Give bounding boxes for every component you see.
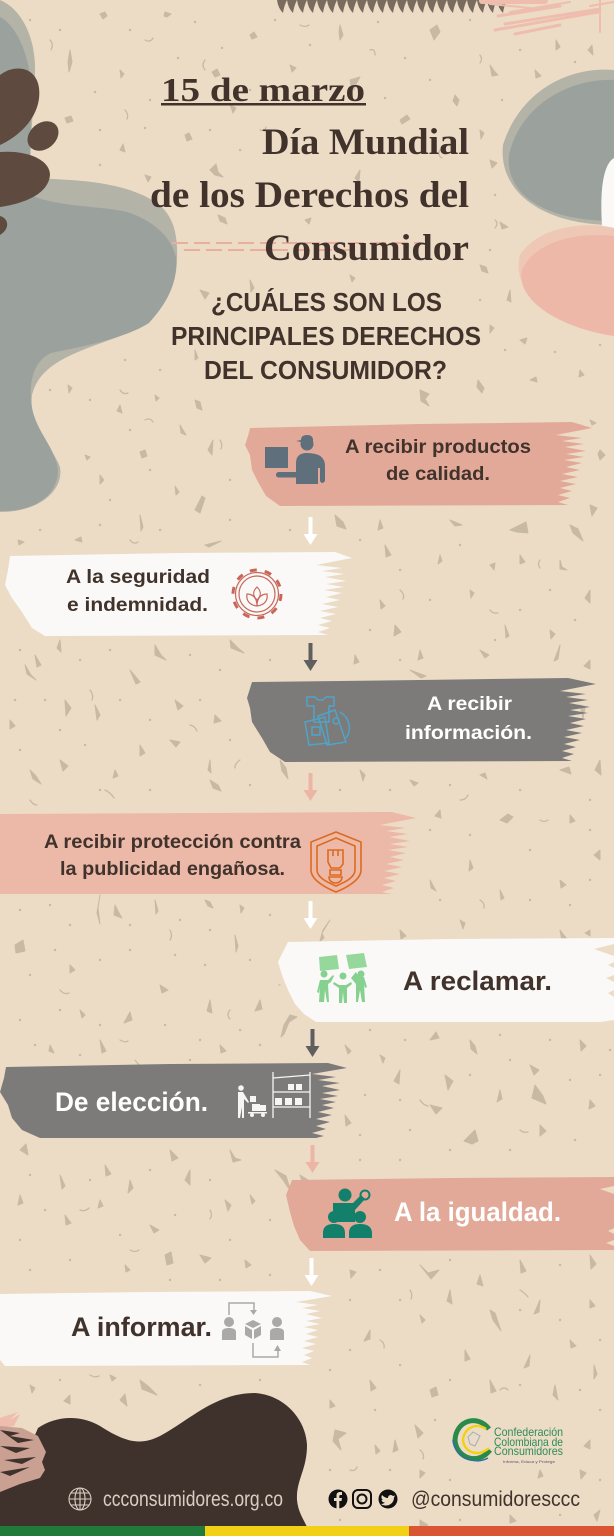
panel: productos de calidad	[245, 422, 592, 506]
text: A informar.	[71, 1312, 212, 1342]
text: información.	[405, 722, 532, 744]
title line 1: Día Mundial	[262, 122, 469, 163]
title	[150, 72, 469, 269]
icon: people group	[323, 1188, 372, 1238]
text: A la seguridad	[66, 566, 210, 588]
logo: Confederación Colombiana de Consumidores	[453, 1421, 563, 1464]
bottom color bar	[0, 1526, 614, 1536]
text: la publicidad engañosa.	[60, 858, 285, 880]
subtitle question: DEL CONSUMIDOR?	[204, 355, 447, 385]
arrow white	[304, 901, 318, 929]
subtitle question	[171, 287, 481, 385]
footer dark blob	[0, 1393, 307, 1527]
left gray blob outer	[0, 0, 177, 512]
subtitle question: PRINCIPALES DERECHOS	[171, 321, 481, 351]
panel: elección	[0, 1063, 347, 1138]
social handle: @consumidoresccc	[411, 1488, 580, 1511]
logo mark	[453, 1421, 490, 1461]
panel: recibir información	[247, 678, 596, 762]
right gray blob outer	[503, 70, 614, 225]
arrow gray	[306, 1029, 320, 1057]
logo text: Colombiana de	[494, 1435, 563, 1449]
top pink brush decoration	[482, 0, 614, 34]
top feather decoration	[277, 0, 507, 13]
arrow gray	[304, 643, 318, 671]
footer pink brush	[0, 1412, 46, 1492]
right pink blob outer	[518, 225, 614, 336]
arrow pink	[304, 773, 318, 801]
panel: protección contra publicidad engañosa	[0, 812, 416, 894]
text	[44, 831, 301, 880]
logo text	[494, 1425, 563, 1464]
panel: informar	[0, 1291, 332, 1366]
logo text: Confederación	[494, 1425, 563, 1439]
title line 3: Consumidor	[264, 228, 469, 269]
icon: facebook	[328, 1490, 348, 1509]
text: A reclamar.	[403, 966, 552, 996]
text: A recibir	[427, 693, 512, 715]
arrow white	[304, 1258, 318, 1286]
brown pebbles	[0, 68, 64, 235]
icon: delivery worker	[265, 435, 325, 484]
icon: cart and shelves	[238, 1072, 310, 1118]
text	[405, 693, 532, 744]
text: A recibir productos	[345, 436, 531, 458]
panel: reclamar	[278, 938, 614, 1022]
icon: exchange between people	[222, 1303, 284, 1357]
dashed pink lines	[172, 243, 420, 250]
arrow white	[304, 517, 318, 545]
panel: igualdad	[286, 1177, 614, 1251]
panel: seguridad e indemnidad	[5, 552, 352, 636]
text: A la igualdad.	[394, 1197, 561, 1227]
icon: twitter	[378, 1490, 398, 1508]
text	[66, 566, 210, 616]
social handle	[328, 1488, 580, 1511]
icon: instagram	[353, 1490, 371, 1508]
logo text: Informa, Educa y Protege	[503, 1459, 556, 1464]
right pink blob inner	[521, 235, 614, 336]
text: de calidad.	[386, 463, 490, 485]
arrow pink	[306, 1145, 320, 1173]
right gray blob inner	[509, 80, 614, 221]
left gray blob inner	[0, 17, 176, 511]
icon: shield with fist	[311, 832, 361, 892]
icon: gear with leaves	[233, 570, 281, 618]
title line 2: de los Derechos del	[150, 175, 469, 216]
subtitle question: ¿CUÁLES SON LOS	[211, 287, 442, 317]
text: e indemnidad.	[67, 594, 208, 616]
logo text: Consumidores	[494, 1444, 563, 1458]
website: ccconsumidores.org.co	[103, 1488, 283, 1511]
date: 15 de marzo	[161, 72, 365, 109]
icon: globe	[69, 1488, 91, 1510]
text: De elección.	[55, 1087, 208, 1117]
icon: protesters	[317, 953, 367, 1003]
text	[345, 436, 531, 485]
right white shape	[601, 158, 614, 241]
icon: information items	[305, 697, 349, 745]
text: A recibir protección contra	[44, 831, 301, 853]
